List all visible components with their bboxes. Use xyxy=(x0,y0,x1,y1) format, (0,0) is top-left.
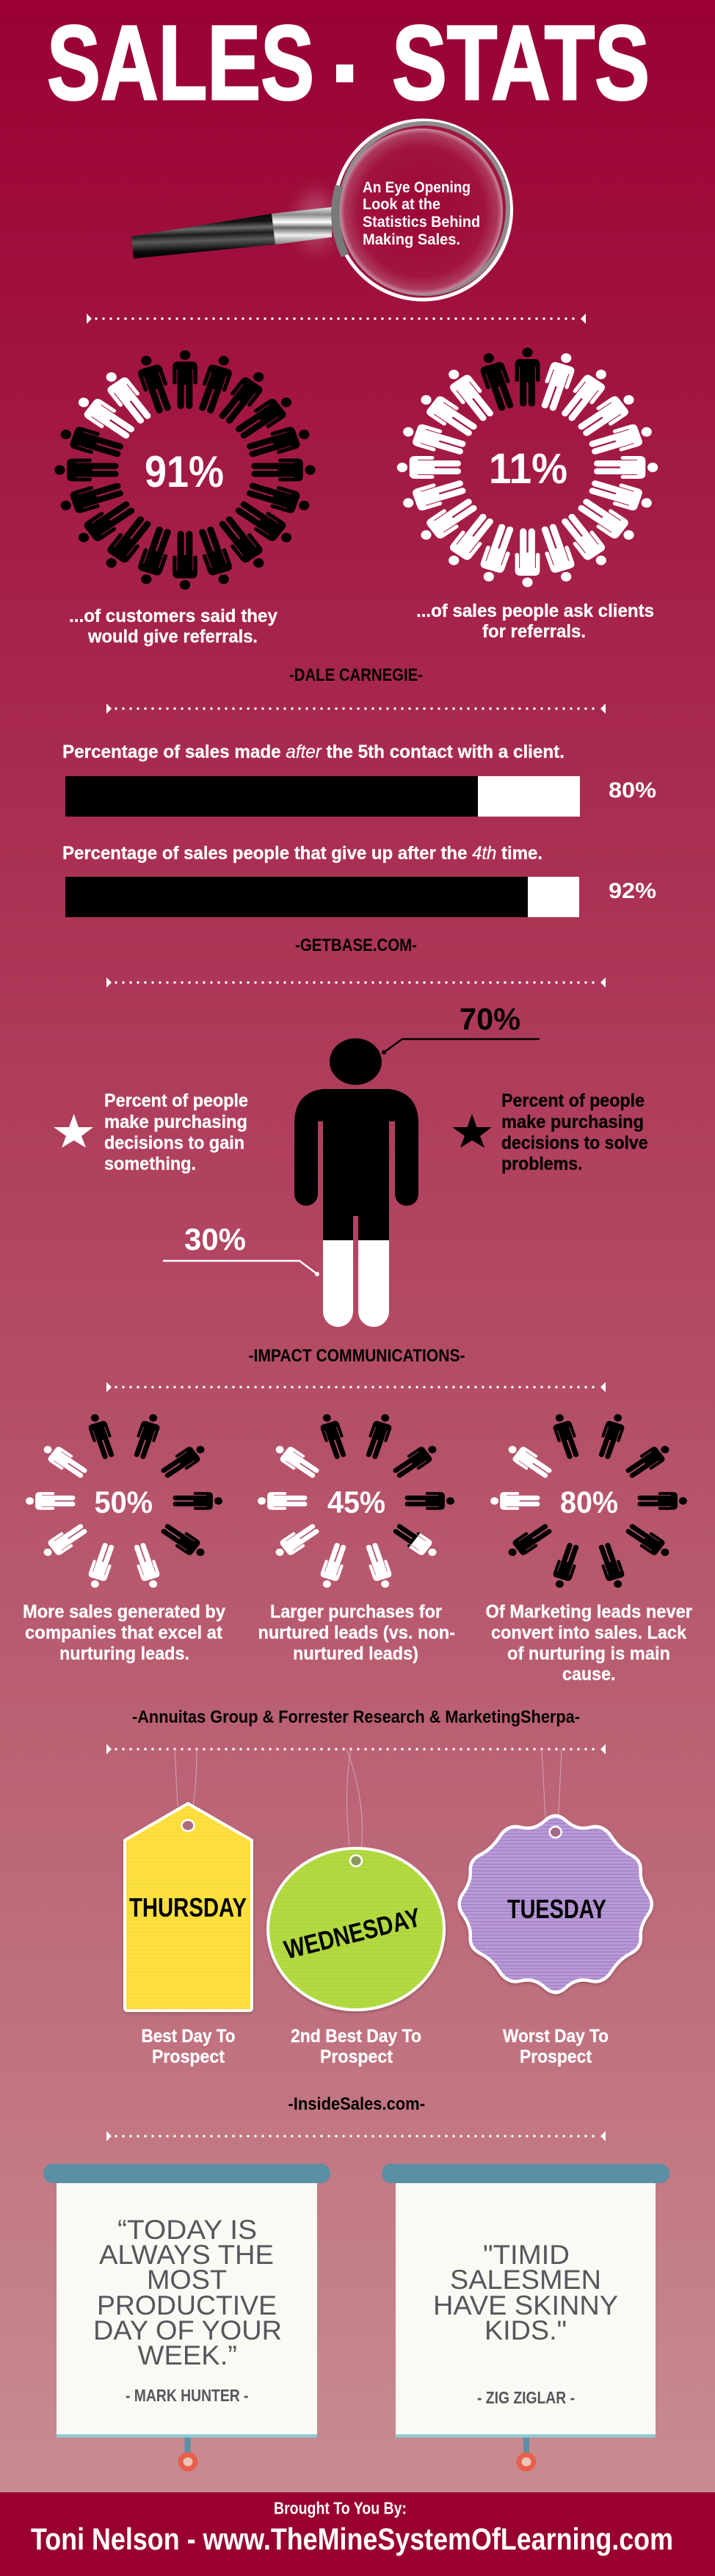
bar chart: sales after 5th contact xyxy=(62,742,656,817)
text: decisions to solve xyxy=(501,1090,648,1174)
caption: more sales: companies that excel at xyxy=(25,1623,223,1643)
icon: white star xyxy=(54,1114,93,1148)
divider xyxy=(106,2131,606,2141)
caption: customers referrals xyxy=(69,606,277,647)
caption: larger purchases: nurtured leads) xyxy=(293,1643,418,1664)
intro text: Making Sales. xyxy=(363,231,460,248)
bar heading: Percentage of sales made after the 5th contact with a client. xyxy=(62,742,565,762)
quote text: KIDS." xyxy=(484,2315,567,2345)
pull cord xyxy=(181,2438,195,2469)
caption: worst day xyxy=(503,2026,609,2067)
people ring: 45% xyxy=(258,1411,454,1591)
text: decisions to solve: decisions to solve xyxy=(501,1132,648,1153)
bar xyxy=(65,776,580,817)
quote text xyxy=(433,2240,618,2345)
quote text: WEEK.” xyxy=(138,2340,237,2370)
quote sheet xyxy=(57,2183,317,2438)
quote text: “TODAY IS xyxy=(117,2215,257,2245)
title: SALES xyxy=(47,4,314,122)
stat: 80%: 80% xyxy=(560,1485,618,1519)
title xyxy=(47,4,650,131)
intro text xyxy=(363,179,480,248)
caption: marketing leads: of nurturing is main xyxy=(507,1643,670,1664)
bar value: 80% xyxy=(609,778,656,803)
text: decisions to solve: make purchasing xyxy=(501,1112,644,1132)
tag: Wednesday: WEDNESDAY xyxy=(281,1902,424,1965)
text: decisions to gain: make purchasing xyxy=(104,1112,247,1132)
magnifier lens xyxy=(333,119,513,301)
stat: 45%: 45% xyxy=(327,1485,385,1519)
stat: 91%: 91% xyxy=(145,447,224,496)
title: · xyxy=(330,13,365,131)
magnifier handle xyxy=(131,207,332,258)
tag: Wednesday xyxy=(268,1749,444,2010)
source: Getbase: -GETBASE.COM- xyxy=(295,936,417,955)
tag: Tuesday: TUESDAY xyxy=(507,1894,606,1924)
divider xyxy=(106,1744,606,1754)
bar xyxy=(65,877,579,917)
caption: more sales: More sales generated by xyxy=(23,1602,225,1622)
panel: Zig Ziglar quote board xyxy=(382,2163,669,2469)
quote text: SALESMEN xyxy=(450,2265,601,2295)
caption: customers referrals: ...of customers said they xyxy=(69,606,277,626)
caption: 2nd best day: Prospect xyxy=(320,2047,393,2067)
tag: Thursday xyxy=(125,1749,252,2011)
source: InsideSales: -InsideSales.com- xyxy=(288,2094,425,2114)
bar heading: Percentage of sales people that give up after the 4th time. xyxy=(62,843,542,864)
people ring: 11% xyxy=(397,348,658,587)
divider xyxy=(106,977,606,988)
stat: 11%: 11% xyxy=(489,445,567,493)
caption: 2nd best day: 2nd Best Day To xyxy=(291,2026,421,2047)
footer lead-in: Brought To You By: xyxy=(274,2498,407,2517)
quote text: PRODUCTIVE xyxy=(97,2290,277,2320)
caption: marketing leads: cause. xyxy=(562,1664,615,1685)
quote text xyxy=(93,2215,282,2370)
quote author: - ZIG ZIGLAR - xyxy=(477,2388,575,2407)
footer xyxy=(0,2492,715,2576)
callout: 70%: 70% xyxy=(460,1002,520,1036)
bottom strip xyxy=(396,2434,656,2438)
bar value: 92% xyxy=(609,879,656,903)
tag: Thursday: THURSDAY xyxy=(129,1892,247,1922)
divider xyxy=(106,703,606,714)
roller xyxy=(382,2163,669,2183)
callout: 30%: 30% xyxy=(184,1222,246,1256)
caption: more sales: nurturing leads. xyxy=(59,1643,189,1664)
large figure 70/30 split xyxy=(294,1038,418,1327)
source: Dale Carnegie: -DALE CARNEGIE- xyxy=(289,665,423,685)
bottom strip xyxy=(57,2434,317,2438)
quote text: HAVE SKINNY xyxy=(433,2290,618,2320)
text: decisions to solve: Percent of people xyxy=(501,1090,645,1111)
caption: worst day: Worst Day To xyxy=(503,2026,609,2047)
stat: 50%: 50% xyxy=(94,1485,153,1519)
intro text: An Eye Opening xyxy=(363,179,471,196)
text: decisions to solve: problems. xyxy=(501,1154,583,1174)
quote text: "TIMID xyxy=(483,2240,570,2270)
caption: marketing leads: Of Marketing leads never xyxy=(486,1602,692,1622)
caption: larger purchases: nurtured leads (vs. non- xyxy=(258,1623,455,1643)
caption: best day: Prospect xyxy=(152,2047,225,2067)
panel: Mark Hunter quote board xyxy=(43,2163,330,2469)
quote text: DAY OF YOUR xyxy=(93,2315,282,2345)
people ring: 91% xyxy=(54,350,316,590)
caption: more sales xyxy=(23,1602,225,1664)
caption: 2nd best day xyxy=(291,2026,421,2067)
title: STATS xyxy=(392,4,650,122)
quote author: - MARK HUNTER - xyxy=(126,2386,248,2405)
caption: marketing leads: convert into sales. Lack xyxy=(491,1623,686,1643)
caption: sales people referrals: for referrals. xyxy=(482,621,586,642)
divider xyxy=(87,314,586,324)
roller xyxy=(43,2163,330,2183)
quote text: ALWAYS THE xyxy=(99,2240,274,2270)
callout: 30% xyxy=(163,1222,319,1276)
caption: larger purchases xyxy=(258,1602,455,1664)
caption: worst day: Prospect xyxy=(520,2047,592,2067)
source: Impact Communications: -IMPACT COMMUNICATIONS- xyxy=(248,1346,465,1366)
caption: best day: Best Day To xyxy=(141,2026,235,2047)
callout: 70% xyxy=(382,1002,540,1054)
caption: sales people referrals xyxy=(416,601,654,642)
text: decisions to gain: Percent of people xyxy=(104,1090,248,1111)
caption: best day xyxy=(141,2026,235,2067)
pull cord xyxy=(519,2438,534,2469)
text: decisions to gain: something. xyxy=(104,1154,196,1174)
source: Annuitas: -Annuitas Group & Forrester Research & MarketingSherpa- xyxy=(132,1707,580,1727)
icon: black star xyxy=(452,1114,492,1148)
quote sheet xyxy=(396,2183,656,2438)
people ring: 50% xyxy=(26,1411,222,1591)
people ring: 80% xyxy=(490,1411,687,1591)
icon: magnifying glass with intro text xyxy=(131,119,513,301)
intro text: Statistics Behind xyxy=(363,214,480,231)
bar chart: give up after 4th time xyxy=(62,843,656,917)
caption: customers referrals: would give referrals. xyxy=(87,626,258,647)
caption: sales people referrals: ...of sales people ask clients xyxy=(416,601,654,621)
caption: marketing leads xyxy=(486,1602,692,1685)
tag: Tuesday xyxy=(460,1749,652,1992)
caption: larger purchases: Larger purchases for xyxy=(270,1602,442,1622)
divider xyxy=(106,1382,606,1392)
text: decisions to gain: decisions to gain xyxy=(104,1132,244,1153)
intro text: Look at the xyxy=(363,196,440,213)
text: decisions to gain xyxy=(104,1090,248,1174)
quote text: MOST xyxy=(147,2265,227,2295)
